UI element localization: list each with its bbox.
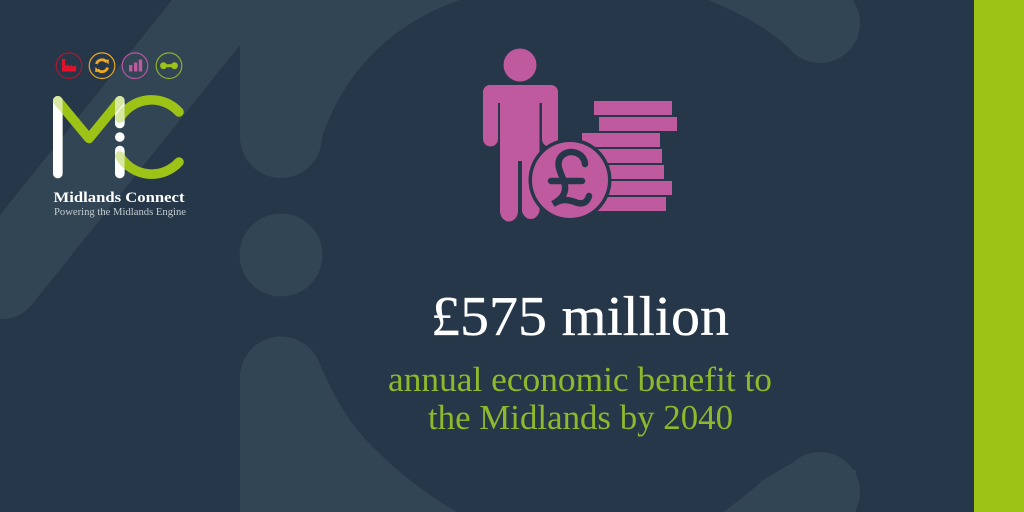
coin stack: [582, 101, 677, 211]
logo name: Midlands Connect: [54, 190, 185, 206]
headline figure: £575 million: [431, 286, 729, 348]
icon: bar chart: [122, 53, 148, 78]
icon: person with pound coin and stack of coins: [483, 48, 677, 222]
subheading line 1: annual economic benefit to: [388, 360, 772, 399]
icon: cycle: [89, 53, 115, 78]
subheading line 2: the Midlands by 2040: [428, 398, 733, 437]
subheading: [388, 360, 772, 437]
logo strapline: Powering the Midlands Engine: [54, 207, 187, 218]
logo: Midlands Connect: [54, 53, 187, 218]
icon: factory: [56, 53, 82, 78]
green side bar: [974, 0, 1024, 512]
icon: connection link: [156, 53, 182, 78]
MC monogram: [58, 100, 179, 174]
person: [483, 48, 558, 222]
pound coin: [528, 138, 612, 222]
